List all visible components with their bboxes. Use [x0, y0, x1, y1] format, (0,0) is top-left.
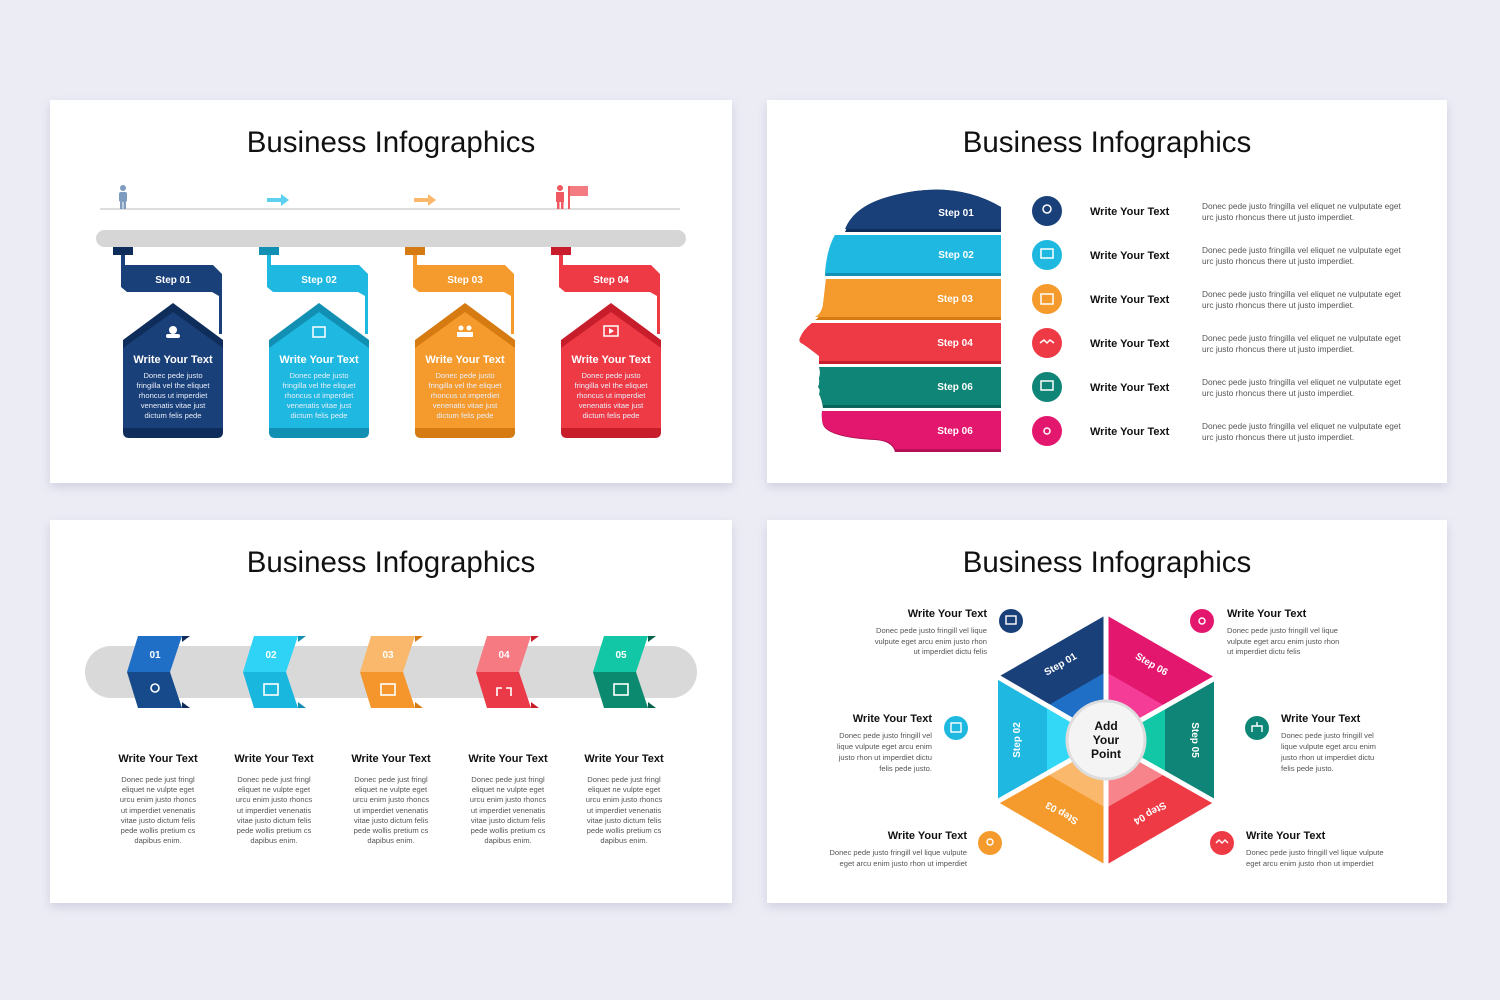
- callouts: Write Your Text: [853, 713, 932, 725]
- text columns: Donec pede just fringl: [587, 775, 661, 784]
- text columns: urcu enim justo rhoncs: [120, 795, 196, 804]
- card 1: fringilla vel the eliquet: [136, 381, 210, 390]
- text columns: Write Your Text: [468, 753, 548, 765]
- text columns: Write Your Text: [234, 753, 314, 765]
- text columns: urcu enim justo rhoncs: [353, 795, 429, 804]
- list rows: Write Your Text: [1090, 294, 1170, 306]
- text columns: eliquet ne vulpte eget: [238, 785, 311, 794]
- text columns: Donec pede just fringl: [471, 775, 545, 784]
- text columns: Write Your Text: [351, 753, 431, 765]
- card 4: [551, 247, 661, 438]
- card 1: Step 01: [155, 275, 191, 286]
- text columns: pede wollis pretium cs: [471, 826, 546, 835]
- card 4: dictum felis pede: [583, 411, 639, 420]
- list rows: Donec pede justo fringilla vel eliquet ne vulputate eget: [1202, 333, 1401, 343]
- list rows: Donec pede justo fringilla vel eliquet ne vulputate eget: [1202, 421, 1401, 431]
- card 3: [405, 247, 515, 438]
- callouts: lique vulpute eget arcu enim: [1281, 742, 1376, 751]
- list rows: Donec pede justo fringilla vel eliquet ne vulputate eget: [1202, 201, 1401, 211]
- list rows: [1032, 196, 1401, 446]
- callouts: Write Your Text: [888, 830, 967, 842]
- text columns: pede wollis pretium cs: [237, 826, 312, 835]
- text columns: Donec pede just fringl: [121, 775, 195, 784]
- list rows: Write Your Text: [1090, 382, 1170, 394]
- card 2: Step 02: [301, 275, 337, 286]
- head stripes: Step 04: [937, 338, 973, 349]
- list rows: Donec pede justo fringilla vel eliquet ne vulputate eget: [1202, 377, 1401, 387]
- list rows: Write Your Text: [1090, 426, 1170, 438]
- list rows: urc justo rhoncus there ut justo imperdiet.: [1202, 300, 1354, 310]
- card 1: Write Your Text: [133, 354, 213, 366]
- title: Business Infographics: [247, 126, 535, 159]
- head stripes: Step 02: [938, 250, 974, 261]
- title: Business Infographics: [963, 126, 1251, 159]
- list rows: urc justo rhoncus there ut justo imperdiet.: [1202, 212, 1354, 222]
- callouts: ut imperdiet dictu felis: [914, 647, 987, 656]
- text columns: ut imperdiet venenatis: [354, 806, 428, 815]
- bar: [96, 230, 686, 247]
- chevron markers: 02: [265, 650, 277, 661]
- callouts: Donec pede justo fringill vel lique vulpute: [1246, 848, 1384, 857]
- card 4: Step 04: [593, 275, 629, 286]
- text columns: vitae justo dictum felis: [237, 816, 311, 825]
- panel: step cards: [50, 100, 732, 483]
- callouts: ut imperdiet dictu felis: [1227, 647, 1301, 656]
- chevron markers: 03: [382, 650, 394, 661]
- chevron markers: 04: [498, 650, 510, 661]
- text columns: eliquet ne vulpte eget: [122, 785, 195, 794]
- card 3: Write Your Text: [425, 354, 505, 366]
- panel: chevrons: [50, 520, 732, 903]
- card 3: rhoncus ut imperdiet: [431, 391, 500, 400]
- text columns: ut imperdiet venenatis: [471, 806, 545, 815]
- title: Business Infographics: [247, 546, 535, 579]
- callouts: vulpute eget arcu enim justo rhon: [1227, 637, 1339, 646]
- list rows: urc justo rhoncus there ut justo imperdiet.: [1202, 388, 1354, 398]
- hexagon chart: Step 03: [1044, 799, 1080, 826]
- callouts: vulpute eget arcu enim justo rhon: [875, 637, 987, 646]
- icon: person: [119, 185, 127, 209]
- hexagon chart: Step 02: [1012, 722, 1023, 758]
- text columns: vitae justo dictum felis: [121, 816, 195, 825]
- text columns: urcu enim justo rhoncs: [586, 795, 662, 804]
- text columns: dapibus enim.: [250, 836, 298, 845]
- callouts: Donec pede justo fringill vel: [839, 731, 932, 740]
- text columns: vitae justo dictum felis: [354, 816, 428, 825]
- card 2: venenatis vitae just: [287, 401, 352, 410]
- list rows: Donec pede justo fringilla vel eliquet ne vulputate eget: [1202, 289, 1401, 299]
- text columns: pede wollis pretium cs: [121, 826, 196, 835]
- card 2: Donec pede justo: [289, 371, 349, 380]
- panel: head: [767, 100, 1447, 483]
- card 1: [113, 247, 223, 438]
- text columns: urcu enim justo rhoncs: [470, 795, 546, 804]
- callouts: Write Your Text: [1246, 830, 1326, 842]
- title: Business Infographics: [963, 546, 1251, 579]
- card 1: venenatis vitae just: [141, 401, 206, 410]
- text columns: dapibus enim.: [367, 836, 415, 845]
- callouts: Write Your Text: [908, 608, 987, 620]
- text columns: pede wollis pretium cs: [587, 826, 662, 835]
- text columns: eliquet ne vulpte eget: [355, 785, 428, 794]
- chevron markers: [127, 636, 656, 708]
- callouts: Donec pede justo fringill vel lique: [1227, 626, 1338, 635]
- card 1: rhoncus ut imperdiet: [139, 391, 208, 400]
- text columns: [118, 753, 664, 845]
- card 3: fringilla vel the eliquet: [428, 381, 502, 390]
- card 4: venenatis vitae just: [579, 401, 644, 410]
- callouts: felis pede justo.: [879, 764, 932, 773]
- text columns: Write Your Text: [118, 753, 198, 765]
- callouts: [829, 608, 1384, 868]
- text columns: dapibus enim.: [134, 836, 182, 845]
- callouts: eget arcu enim justo rhon ut imperdiet: [840, 859, 968, 868]
- pill: [85, 646, 697, 698]
- callouts: Donec pede justo fringill vel: [1281, 731, 1374, 740]
- callouts: Write Your Text: [1227, 608, 1307, 620]
- text columns: vitae justo dictum felis: [471, 816, 545, 825]
- chevron markers: 05: [615, 650, 627, 661]
- text columns: ut imperdiet venenatis: [121, 806, 195, 815]
- text columns: Donec pede just fringl: [237, 775, 311, 784]
- list rows: Donec pede justo fringilla vel eliquet ne vulputate eget: [1202, 245, 1401, 255]
- card 2: [259, 247, 369, 438]
- hexagon chart: Point: [1091, 747, 1121, 761]
- callouts: eget arcu enim justo rhon ut imperdiet: [1246, 859, 1374, 868]
- text columns: urcu enim justo rhoncs: [236, 795, 312, 804]
- callouts: Donec pede justo fringill vel lique vulpute: [829, 848, 967, 857]
- card 4: Donec pede justo: [581, 371, 641, 380]
- card 1: dictum felis pede: [145, 411, 201, 420]
- head stripes: Step 06: [937, 382, 973, 393]
- text columns: eliquet ne vulpte eget: [472, 785, 545, 794]
- text columns: ut imperdiet venenatis: [237, 806, 311, 815]
- text columns: ut imperdiet venenatis: [587, 806, 661, 815]
- chevron markers: 01: [149, 650, 161, 661]
- callouts: justo rhon ut imperdiet dictu: [1280, 753, 1374, 762]
- callouts: lique vulpute eget arcu enim: [837, 742, 932, 751]
- head stripes: Step 01: [938, 208, 974, 219]
- card 2: rhoncus ut imperdiet: [285, 391, 354, 400]
- callouts: Donec pede justo fringill vel lique: [876, 626, 987, 635]
- text columns: vitae justo dictum felis: [587, 816, 661, 825]
- list rows: urc justo rhoncus there ut justo imperdiet.: [1202, 432, 1354, 442]
- head stripes: Step 06: [937, 426, 973, 437]
- card 2: Write Your Text: [279, 354, 359, 366]
- card 2: fringilla vel the eliquet: [282, 381, 356, 390]
- hexagon chart: Add: [1094, 719, 1118, 733]
- text columns: Write Your Text: [584, 753, 664, 765]
- hexagon chart: Step 05: [1189, 722, 1200, 758]
- list rows: Write Your Text: [1090, 338, 1170, 350]
- card 4: rhoncus ut imperdiet: [577, 391, 646, 400]
- hexagon chart: Step 06: [1133, 651, 1170, 679]
- text columns: dapibus enim.: [600, 836, 648, 845]
- callouts: justo rhon ut imperdiet dictu: [838, 753, 932, 762]
- list rows: urc justo rhoncus there ut justo imperdiet.: [1202, 256, 1354, 266]
- text columns: Donec pede just fringl: [354, 775, 428, 784]
- icon: goal: [556, 185, 588, 209]
- icon: arrow orange: [414, 194, 436, 206]
- text columns: dapibus enim.: [484, 836, 532, 845]
- hexagon chart: Your: [1093, 733, 1120, 747]
- hexagon chart: Step 01: [1043, 651, 1079, 678]
- list rows: Write Your Text: [1090, 206, 1170, 218]
- callouts: felis pede justo.: [1281, 764, 1334, 773]
- card 3: Step 03: [447, 275, 483, 286]
- card 4: Write Your Text: [571, 354, 651, 366]
- card 3: venenatis vitae just: [433, 401, 498, 410]
- panel: hexagon: [767, 520, 1447, 903]
- text columns: pede wollis pretium cs: [354, 826, 429, 835]
- card 3: dictum felis pede: [437, 411, 493, 420]
- card 4: fringilla vel the eliquet: [574, 381, 648, 390]
- icon: arrow cyan: [267, 194, 289, 206]
- card 3: Donec pede justo: [435, 371, 495, 380]
- head stripes: [799, 190, 1001, 452]
- text columns: eliquet ne vulpte eget: [588, 785, 661, 794]
- hexagon chart: Step 04: [1131, 799, 1168, 826]
- head stripes: Step 03: [937, 294, 973, 305]
- list rows: urc justo rhoncus there ut justo imperdiet.: [1202, 344, 1354, 354]
- hexagon chart: [995, 612, 1217, 868]
- card 1: Donec pede justo: [143, 371, 203, 380]
- timeline: [100, 185, 680, 209]
- card 2: dictum felis pede: [291, 411, 347, 420]
- list rows: Write Your Text: [1090, 250, 1170, 262]
- callouts: Write Your Text: [1281, 713, 1361, 725]
